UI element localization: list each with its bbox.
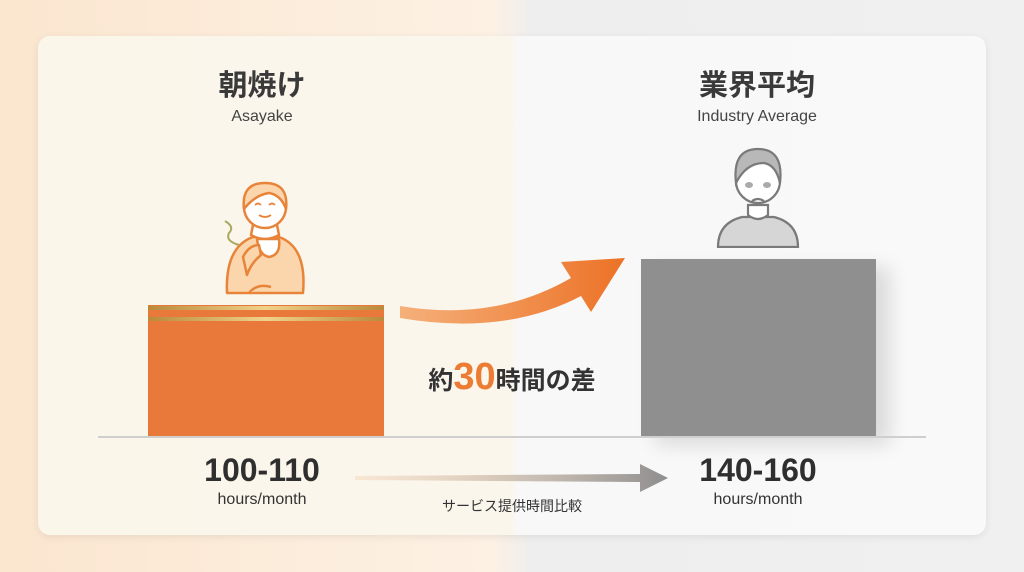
title: industry average: Industry Average (697, 108, 817, 125)
value: industry: 140-160 (699, 452, 817, 488)
arrow: curved orange (400, 258, 625, 324)
grey bar: industry average (641, 259, 876, 437)
value: industry (699, 452, 817, 508)
title: industry average: 業界平均 (699, 70, 815, 102)
title: Asayake: 朝焼け (218, 70, 306, 102)
value: Asayake: 100-110 (204, 452, 320, 488)
callout: 30 hour difference: 約30時間の差 (428, 356, 596, 398)
value: industry: hours/month (714, 491, 802, 508)
title: Asayake (218, 70, 306, 125)
value: Asayake (204, 452, 320, 508)
value: Asayake: hours/month (218, 491, 306, 508)
title: Asayake: Asayake (231, 108, 293, 125)
orange bar: Asayake (148, 305, 384, 437)
icon: tired person (716, 148, 800, 248)
caption: サービス提供時間比較 (442, 498, 582, 514)
title: industry average (697, 70, 817, 125)
icon: happy person with coffee (224, 182, 305, 294)
arrow: comparison (355, 464, 668, 492)
baseline (98, 436, 926, 438)
